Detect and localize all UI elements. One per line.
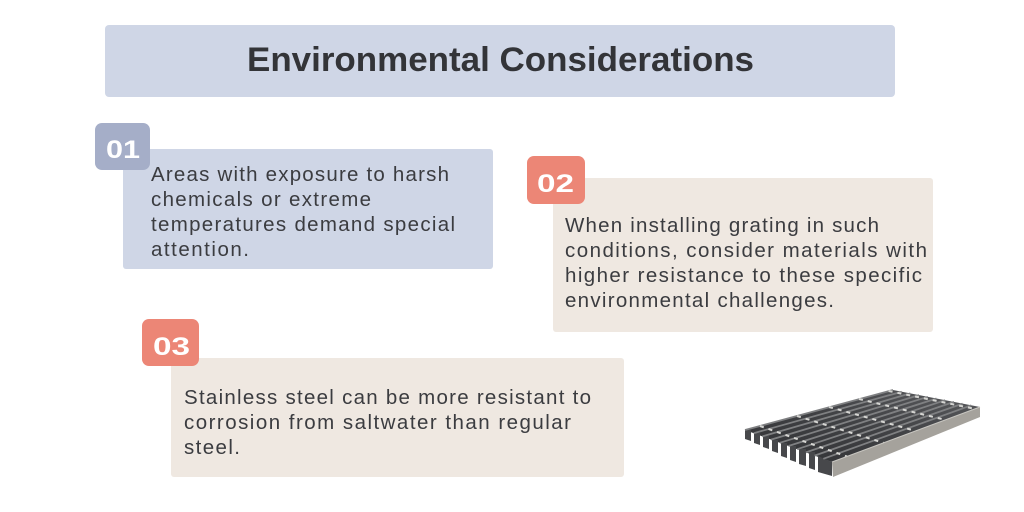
- panel: 01 chemicals and temperatures: [95, 123, 493, 269]
- badge 02: [527, 156, 585, 204]
- text block 01: temperatures demand special: [151, 213, 455, 236]
- text block 02: environmental challenges.: [565, 289, 834, 312]
- text block 02: When installing grating in such: [565, 214, 879, 237]
- text block 02: [565, 214, 927, 312]
- icon: steel grating: [745, 390, 980, 477]
- text block 02: conditions, consider materials with: [565, 239, 927, 262]
- text block 03: [184, 386, 591, 459]
- badge 03: 03: [153, 333, 190, 361]
- title banner: [105, 25, 895, 97]
- badge 03: [142, 319, 199, 366]
- text block 02: higher resistance to these specific: [565, 264, 922, 287]
- badge 01: [95, 123, 150, 170]
- text block 03: corrosion from saltwater than regular: [184, 411, 571, 434]
- panel: 03 stainless steel: [142, 319, 624, 477]
- text block 03: Stainless steel can be more resistant to: [184, 386, 591, 409]
- text block 01: [151, 163, 455, 261]
- text block 01: chemicals or extreme: [151, 188, 371, 211]
- text block 01: Areas with exposure to harsh: [151, 163, 449, 186]
- badge 01: 01: [106, 136, 140, 164]
- text block 03: steel.: [184, 436, 240, 459]
- panel: 02 material resistance: [527, 156, 933, 332]
- title: Environmental Considerations: [247, 41, 754, 79]
- text block 01: attention.: [151, 238, 249, 261]
- badge 02: 02: [537, 170, 574, 198]
